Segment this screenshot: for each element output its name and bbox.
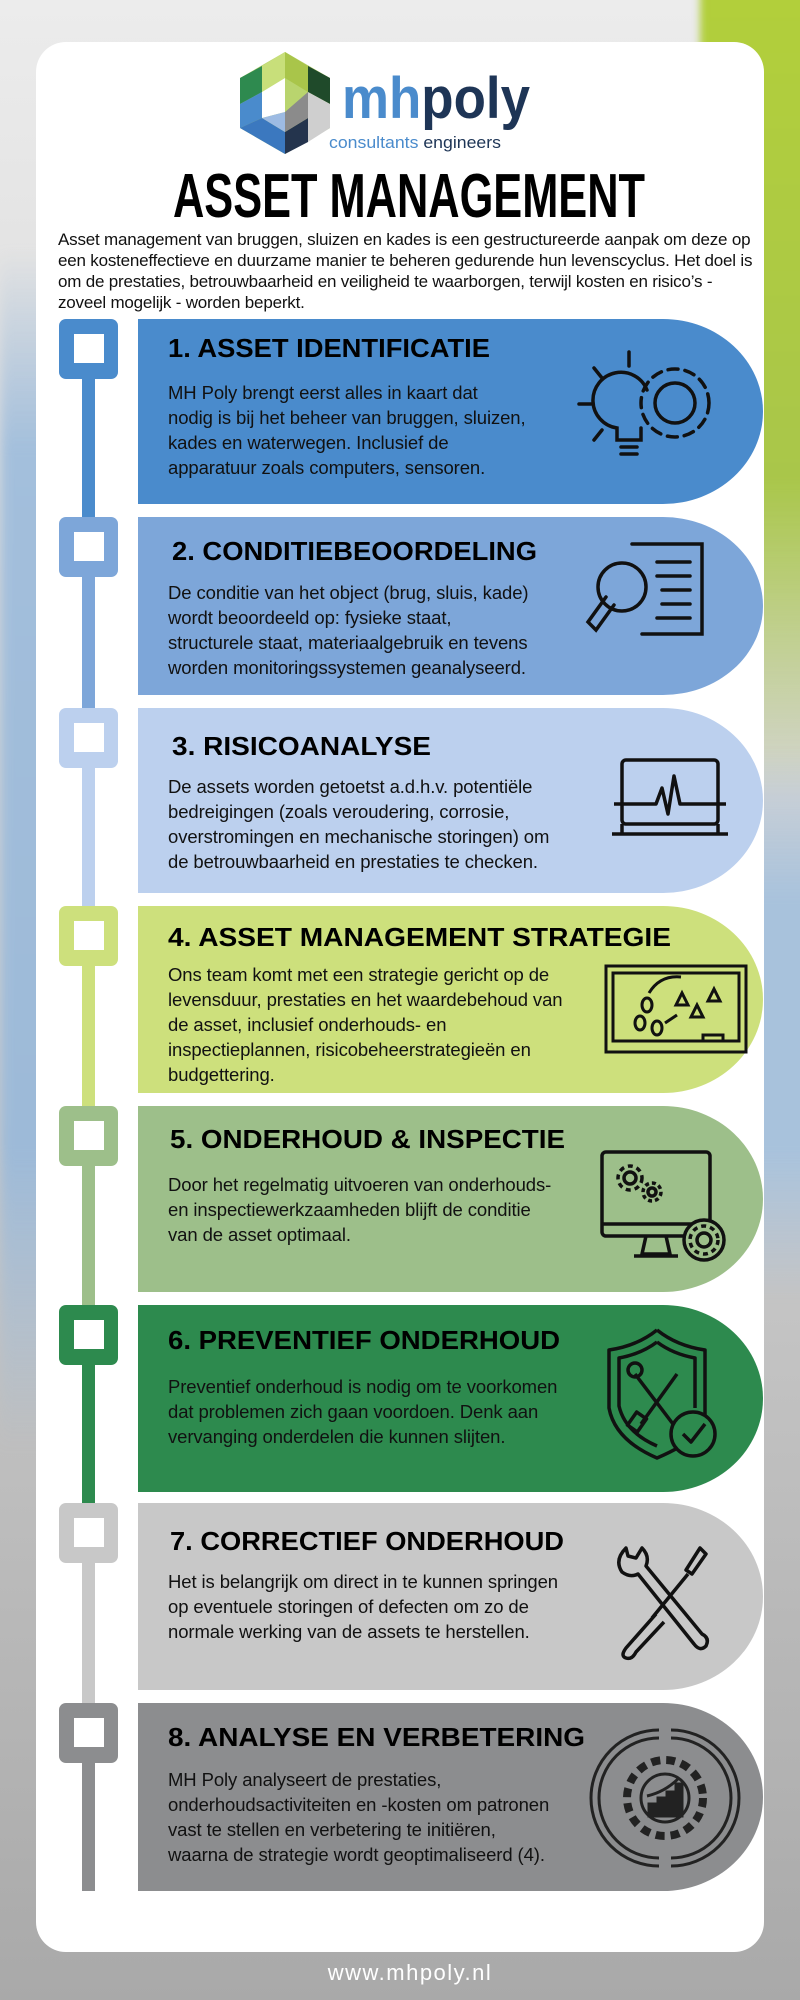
intro text: zoveel mogelijk - worden beperkt. (58, 293, 305, 312)
text 8: onderhoudsactiviteiten en -kosten om patronen (168, 1794, 549, 1815)
panel 2 (59, 517, 763, 708)
text 4: inspectieplannen, risicobeheerstrategieën en (168, 1039, 531, 1060)
footer url: www.mhpoly.nl (328, 1960, 492, 1985)
heading 4: 4. ASSET MANAGEMENT STRATEGIE (168, 922, 671, 952)
text 1: MH Poly brengt eerst alles in kaart dat (168, 382, 478, 403)
text 6: dat problemen zich gaan voordoen. Denk aan (168, 1401, 538, 1422)
text 3: overstromingen en mechanische storingen) om (168, 826, 549, 847)
text 4: budgettering. (168, 1064, 275, 1085)
icon: hexagon logo mark (240, 52, 330, 154)
text 1: nodig is bij het beheer van bruggen, sluizen, (168, 407, 526, 428)
text 1 (168, 382, 526, 478)
panel 6 (59, 1305, 763, 1503)
text 4: Ons team komt met een strategie gericht op de (168, 964, 549, 985)
heading 2: 2. CONDITIEBEOORDELING (172, 536, 537, 566)
text 3 (168, 776, 549, 872)
panel 1 (59, 319, 763, 517)
icon: cycle gear chart (590, 1728, 740, 1868)
logo text (329, 66, 530, 152)
text 5: Door het regelmatig uitvoeren van onderhouds- (168, 1174, 551, 1195)
icon: bulb and gear (577, 350, 711, 456)
text 2: De conditie van het object (brug, sluis, kade) (168, 582, 528, 603)
text 4: levensduur, prestaties en het waardebehoud van (168, 989, 562, 1010)
heading 6: 6. PREVENTIEF ONDERHOUD (168, 1325, 560, 1355)
panel 5 (59, 1106, 763, 1305)
icon: monitor with gears (600, 1150, 726, 1262)
text 3: de betrouwbaarheid en prestaties te checken. (168, 851, 538, 872)
logo text: consultants engineers (329, 133, 501, 152)
text 3: bedreigingen (zoals veroudering, corrosie, (168, 801, 509, 822)
text 1: apparatuur zoals computers, sensoren. (168, 457, 485, 478)
icon: shield with tools (607, 1328, 717, 1460)
text 5: en inspectiewerkzaamheden blijft de conditie (168, 1199, 531, 1220)
text 2: structurele staat, materiaalgebruik en tevens (168, 632, 528, 653)
text 2: worden monitoringssystemen geanalyseerd. (168, 657, 526, 678)
intro text (58, 230, 752, 312)
text 7: Het is belangrijk om direct in te kunnen springen (168, 1571, 558, 1592)
text 4: de asset, inclusief onderhouds- en (168, 1014, 446, 1035)
text 8 (168, 1769, 549, 1865)
text 8: waarna de strategie wordt geoptimaliseerd (4). (168, 1844, 545, 1865)
icon: strategy board (604, 964, 748, 1054)
text 8: MH Poly analyseert de prestaties, (168, 1769, 441, 1790)
heading 8: 8. ANALYSE EN VERBETERING (168, 1722, 585, 1752)
heading 3: 3. RISICOANALYSE (172, 731, 431, 761)
text 3: De assets worden getoetst a.d.h.v. potentiële (168, 776, 532, 797)
intro text: een kosteneffectieve en duurzame manier te beheren gedurende hun levenscyclus. Het doel is (58, 251, 752, 270)
logo (240, 52, 530, 154)
icon: wrench and screwdriver (617, 1546, 710, 1660)
panel 4 (59, 906, 763, 1106)
icon: magnifier on document (586, 542, 704, 636)
text 6 (168, 1376, 557, 1447)
icon: laptop with pulse (612, 758, 728, 836)
intro text: Asset management van bruggen, sluizen en kades is een gestructureerde aanpak om deze op (58, 230, 750, 249)
text 6: vervanging onderdelen die kunnen slijten. (168, 1426, 505, 1447)
heading 5: 5. ONDERHOUD & INSPECTIE (170, 1124, 565, 1154)
text 6: Preventief onderhoud is nodig om te voorkomen (168, 1376, 557, 1397)
text 4 (168, 964, 562, 1085)
heading 1: 1. ASSET IDENTIFICATIE (168, 333, 490, 363)
text 7: op eventuele storingen of defecten om zo de (168, 1596, 529, 1617)
logo text: mhpoly (342, 66, 530, 131)
text 8: vast te stellen en verbetering te initiëren, (168, 1819, 496, 1840)
text 5: van de asset optimaal. (168, 1224, 351, 1245)
heading 7: 7. CORRECTIEF ONDERHOUD (170, 1526, 564, 1556)
text 2 (168, 582, 528, 678)
text 7: normale werking van de assets te herstellen. (168, 1621, 530, 1642)
panel 3 (59, 708, 763, 906)
text 1: kades en waterwegen. Inclusief de (168, 432, 449, 453)
text 5 (168, 1174, 551, 1245)
text 2: wordt beoordeeld op: fysieke staat, (168, 607, 451, 628)
text 7 (168, 1571, 558, 1642)
intro text: om de prestaties, betrouwbaarheid en veiligheid te waarborgen, terwijl kosten en risico’s - (58, 272, 712, 291)
